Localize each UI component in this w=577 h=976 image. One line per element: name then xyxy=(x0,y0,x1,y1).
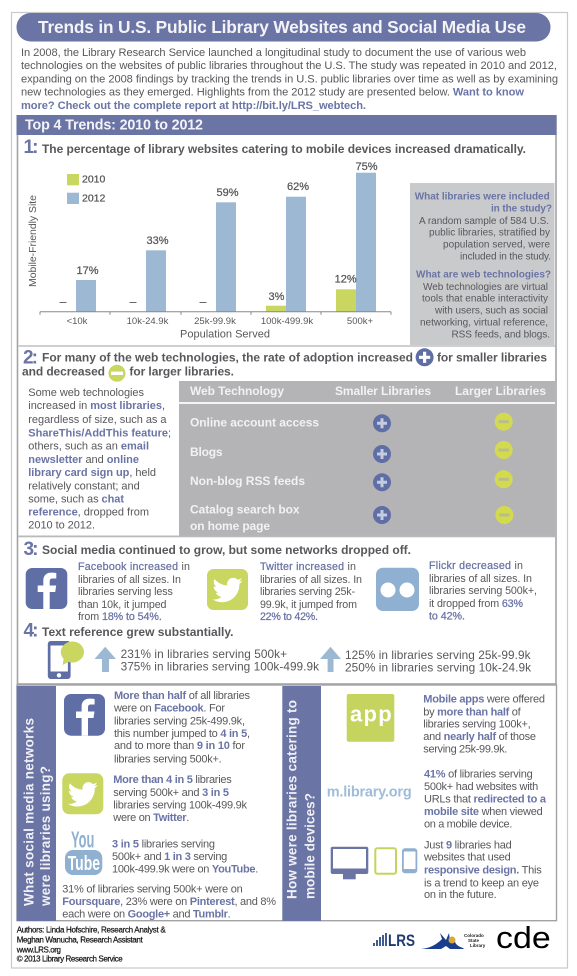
minus icons xyxy=(495,413,513,524)
icon: youtube: You xyxy=(71,827,94,853)
category labels xyxy=(67,316,374,327)
icon: plus xyxy=(416,348,434,366)
trend 2 heading: for larger libraries. xyxy=(129,365,234,379)
trend 2 side text: 2010 to 2012. xyxy=(28,520,95,532)
trend 3 heading: Social media continued to grow, but some networks dropped off. xyxy=(42,543,411,557)
flickr trend: it dropped from 63% xyxy=(429,598,523,610)
trend 2 side text: newsletter and online xyxy=(28,454,139,466)
table header xyxy=(190,384,546,398)
facebook stat: and to more than 9 in 10 for xyxy=(114,740,245,752)
trend 2 side text: library card sign up, held xyxy=(28,467,156,479)
facebook stat: were on Facebook. For xyxy=(113,703,225,715)
trend 2 side text: Some web technologies xyxy=(28,387,144,399)
row labels: Non-blog RSS feeds xyxy=(190,474,305,488)
other networks stat: each were on Google+ and Tumblr. xyxy=(62,908,231,920)
value labels: 62% xyxy=(287,181,309,193)
row labels: Catalog search box xyxy=(190,502,300,516)
category labels: 500k+ xyxy=(347,316,374,327)
logo: Colorado State Library: Colorado xyxy=(464,933,484,938)
authors credit: Authors: Linda Hofschire, Research Analyst & xyxy=(17,925,166,934)
logo: LRS xyxy=(374,931,415,950)
callout: study notes: Web technologies are virtual xyxy=(423,282,548,293)
mobile site stat: 500k+ had websites with xyxy=(424,781,538,793)
icon: facebook xyxy=(26,568,67,609)
logo: Colorado State Library xyxy=(421,933,486,949)
authors credit xyxy=(16,925,166,963)
arrow up xyxy=(320,647,341,672)
sidebar: mobile question: mobile devices? xyxy=(302,793,317,899)
mobile apps stat xyxy=(347,693,545,755)
value labels: 59% xyxy=(216,187,239,199)
logo: Colorado State Library: Library xyxy=(470,943,486,948)
callout: study notes: networking, virtual reference, xyxy=(420,318,548,329)
flickr trend xyxy=(376,560,537,622)
row labels: Online account access xyxy=(190,416,319,430)
responsive design stat: Just 9 libraries had xyxy=(424,839,512,851)
row labels: Blogs xyxy=(190,445,223,459)
sidebar: mobile question xyxy=(282,686,321,921)
callout: study notes: tools that enable interactivity xyxy=(422,294,548,305)
title banner: Trends in U.S. Public Library Websites and Social Media Use xyxy=(38,17,526,37)
facebook stat: this number jumped to 4 in 5, xyxy=(114,728,250,740)
mobile apps stat: serving 25k-99.9k. xyxy=(423,743,507,755)
responsive design stat: responsive design. This xyxy=(424,864,542,876)
icon: twitter xyxy=(62,773,103,814)
x axis title: Population Served xyxy=(180,328,270,340)
youtube stat xyxy=(65,827,258,875)
twitter stat xyxy=(62,773,247,824)
authors credit: © 2013 Library Research Service xyxy=(17,954,123,963)
twitter trend: 22% to 42%. xyxy=(260,611,318,623)
responsive design stat: on in the future. xyxy=(424,889,497,901)
intro paragraph: new technologies as they emerged. Highlights from the 2012 study are presented below. Want to know xyxy=(21,86,524,98)
twitter trend: Twitter increased in xyxy=(260,561,356,573)
twitter trend: 99.9k, it jumped from xyxy=(260,599,357,611)
trend 2 side text: reference, dropped from xyxy=(28,506,149,518)
divider xyxy=(18,345,555,347)
text reference stats: smaller libraries: 250% in libraries serving 10k-24.9k xyxy=(345,661,531,675)
authors credit: Meghan Wanucha, Research Assistant xyxy=(17,935,143,944)
sidebar: social media question: What social media networks xyxy=(21,718,36,906)
text reference stats: smaller libraries: 125% in libraries serving 25k-99.9k xyxy=(345,648,531,662)
mobile site stat: 41% of libraries serving xyxy=(424,768,533,780)
twitter stat: More than 4 in 5 libraries xyxy=(113,774,232,786)
icon: devices xyxy=(331,847,417,879)
logo: cde: cde xyxy=(496,920,551,955)
callout: study notes: What are web technologies? xyxy=(416,270,551,281)
logo: Colorado State Library: State xyxy=(468,938,480,943)
axis xyxy=(40,312,391,315)
trend 2 side text: increased in most libraries, xyxy=(28,400,165,412)
facebook stat xyxy=(64,690,250,765)
value labels: 33% xyxy=(146,235,169,247)
value labels xyxy=(76,161,378,303)
facebook stat: libraries serving 25k-499.9k, xyxy=(114,715,245,727)
twitter trend xyxy=(207,561,362,623)
trend 1 heading: 1: xyxy=(24,137,38,158)
twitter stat: were on Twitter. xyxy=(112,812,189,824)
trend 2 heading xyxy=(22,347,547,382)
intro paragraph: In 2008, the Library Research Service launched a longitudinal study to document the use of various web xyxy=(21,47,526,59)
logo: LRS: LRS xyxy=(388,931,415,950)
facebook trend xyxy=(26,561,190,623)
row labels: on home page xyxy=(190,519,270,533)
other networks stat: 31% of libraries serving 500k+ were on xyxy=(62,883,243,895)
callout: study notes: A random sample of 584 U.S. xyxy=(419,216,549,227)
text reference stats: large libraries: 375% in libraries serving 100k-499.9k xyxy=(121,660,319,674)
sidebar: social media question xyxy=(17,686,56,921)
trend 3 heading xyxy=(24,539,411,560)
panel heading: Top 4 Trends: 2010 to 2012 xyxy=(25,118,203,134)
category labels: 25k-99.9k xyxy=(194,316,236,327)
other networks stat: Foursquare, 23% were on Pinterest, and 8% xyxy=(62,896,276,908)
facebook trend: libraries of all sizes. In xyxy=(78,574,181,586)
bar chart: mobile-friendly sites xyxy=(27,161,391,340)
trend 4 heading xyxy=(24,621,234,642)
trend 2 side text: relatively constant; and xyxy=(28,480,140,492)
intro paragraph: more? Check out the complete report at http://bit.ly/LRS_webtech. xyxy=(21,100,366,112)
trend 4 heading: Text reference grew substantially. xyxy=(42,625,234,639)
flickr trend: Flickr decreased in xyxy=(429,560,523,572)
text reference stats: large libraries: 231% in libraries serving 500k+ xyxy=(121,647,287,661)
callout: study notes: public libraries, stratified by xyxy=(429,227,550,238)
category labels: 10k-24.9k xyxy=(127,316,169,327)
callout: study notes: with users, such as social xyxy=(434,306,548,317)
icon: facebook xyxy=(64,694,105,736)
mobile site stat: mobile site when viewed xyxy=(424,806,543,818)
facebook trend: from 18% to 54%. xyxy=(78,611,162,623)
trend 2 side text: regardless of size, such as a xyxy=(28,414,167,426)
mobile apps stat: Mobile apps were offered xyxy=(423,693,545,705)
value labels: 12% xyxy=(335,274,357,286)
arrow up xyxy=(94,647,116,672)
callout: study notes xyxy=(410,183,554,345)
callout: study notes: What libraries were included xyxy=(415,191,550,202)
legend xyxy=(67,174,106,205)
youtube stat: 500k+ and 1 in 3 serving xyxy=(112,851,227,863)
m.library.org label: m.library.org xyxy=(327,785,412,801)
mobile site stat: on a mobile device. xyxy=(424,818,512,830)
responsive design stat: websites that used xyxy=(423,852,511,864)
facebook trend: Facebook increased in xyxy=(78,561,190,573)
text reference stats: smaller libraries xyxy=(345,648,531,675)
value labels: 17% xyxy=(76,265,99,277)
trend 2 heading: for smaller libraries xyxy=(437,350,547,364)
facebook stat: More than half of all libraries xyxy=(114,690,250,702)
plus icons xyxy=(373,414,391,524)
other networks stat xyxy=(62,883,276,920)
trend 2 heading: and decreased xyxy=(22,365,105,379)
table header: Web Technology xyxy=(190,384,284,398)
trend 2 heading: For many of the web technologies, the rate of adoption increased xyxy=(42,350,413,364)
divider xyxy=(18,536,555,537)
callout: study notes: included in the study. xyxy=(460,252,551,263)
trend 1 heading: The percentage of library websites catering to mobile devices increased dramatically. xyxy=(42,142,526,156)
mobile apps stat: libraries serving 100k+, xyxy=(423,718,531,730)
callout: study notes: population served, were xyxy=(443,240,550,251)
trend 2 side text: some, such as chat xyxy=(28,494,124,506)
twitter stat: libraries serving 100k-499.9k xyxy=(113,799,248,811)
facebook stat: libraries serving 500k+. xyxy=(114,753,222,765)
trend 2 side text: ShareThis/AddThis feature; xyxy=(28,428,171,440)
facebook trend: libraries serving less xyxy=(78,586,173,598)
twitter trend: libraries of all sizes. In xyxy=(260,574,362,586)
table: web technology adoption xyxy=(179,381,555,536)
text reference stats: large libraries xyxy=(121,647,319,674)
twitter trend: libraries serving 25k- xyxy=(260,586,355,598)
icon: twitter xyxy=(207,569,248,610)
authors credit: www.LRS.org xyxy=(16,945,61,954)
title banner xyxy=(16,13,550,42)
mobile site stat: URLs that redirected to a xyxy=(424,793,547,805)
youtube stat: 100k-499.9k were on YouTube. xyxy=(112,863,258,875)
facebook trend: than 10k, it jumped xyxy=(78,599,167,611)
sidebar: social media question: were libraries using? xyxy=(38,766,53,907)
panel heading xyxy=(16,115,556,135)
mobile apps stat: and nearly half of those xyxy=(423,731,536,743)
youtube stat: 3 in 5 libraries serving xyxy=(112,838,215,850)
icon: youtube xyxy=(65,827,102,875)
trend 4 heading: 4: xyxy=(24,621,38,642)
no-data dashes xyxy=(60,302,206,303)
icon: phone with speech bubble xyxy=(48,641,84,679)
category labels: 100k-499.9k xyxy=(261,316,313,327)
flickr trend: libraries of all sizes. In xyxy=(429,573,532,585)
mobile apps stat: by more than half of xyxy=(423,706,522,718)
mobile site stat xyxy=(327,768,547,830)
icon: flickr xyxy=(376,568,419,611)
panel: lower section xyxy=(17,685,556,921)
value labels: 75% xyxy=(355,161,378,173)
icon: app: app xyxy=(350,702,392,727)
table header: Smaller Libraries xyxy=(335,384,431,398)
trend 2 side text: others, such as an email xyxy=(28,440,149,452)
table header: Larger Libraries xyxy=(455,384,546,398)
sidebar: mobile question: How were libraries catering to xyxy=(285,700,300,899)
trend 1 heading xyxy=(24,137,526,158)
panel: top 4 trends xyxy=(16,115,556,684)
callout: study notes: RSS feeds, and blogs. xyxy=(452,330,550,341)
flickr trend: libraries serving 500k+, xyxy=(429,585,537,597)
legend: 2012 xyxy=(82,193,106,205)
icon: app xyxy=(347,694,394,742)
icon: youtube: Tube xyxy=(68,853,100,875)
twitter stat: serving 500k+ and 3 in 5 xyxy=(113,787,229,799)
callout: study notes: in the study? xyxy=(491,204,552,215)
row labels xyxy=(190,416,319,533)
responsive design stat xyxy=(331,839,542,901)
intro paragraph: technologies on the websites of public libraries throughout the U.S. The study was repeated in 2010 and 2012, xyxy=(21,60,557,72)
y axis label: Mobile-Friendly Site xyxy=(27,195,39,287)
value labels: 3% xyxy=(269,291,285,303)
flickr trend: to 42%. xyxy=(429,610,465,622)
category labels: <10k xyxy=(67,316,88,327)
legend: 2010 xyxy=(82,174,106,186)
trend 2 heading: 2: xyxy=(23,347,38,368)
trend 2 side text xyxy=(28,387,171,532)
icon: minus xyxy=(108,365,126,382)
trend 3 heading: 3: xyxy=(24,539,38,560)
intro paragraph: expanding on the 2008 findings by tracking the trends in U.S. public libraries over time as well as by examining xyxy=(21,74,558,86)
bars 2010 xyxy=(266,289,356,312)
responsive design stat: is a trend to keep an eye xyxy=(424,877,539,889)
intro paragraph xyxy=(21,47,558,112)
bars 2012 xyxy=(76,173,376,312)
